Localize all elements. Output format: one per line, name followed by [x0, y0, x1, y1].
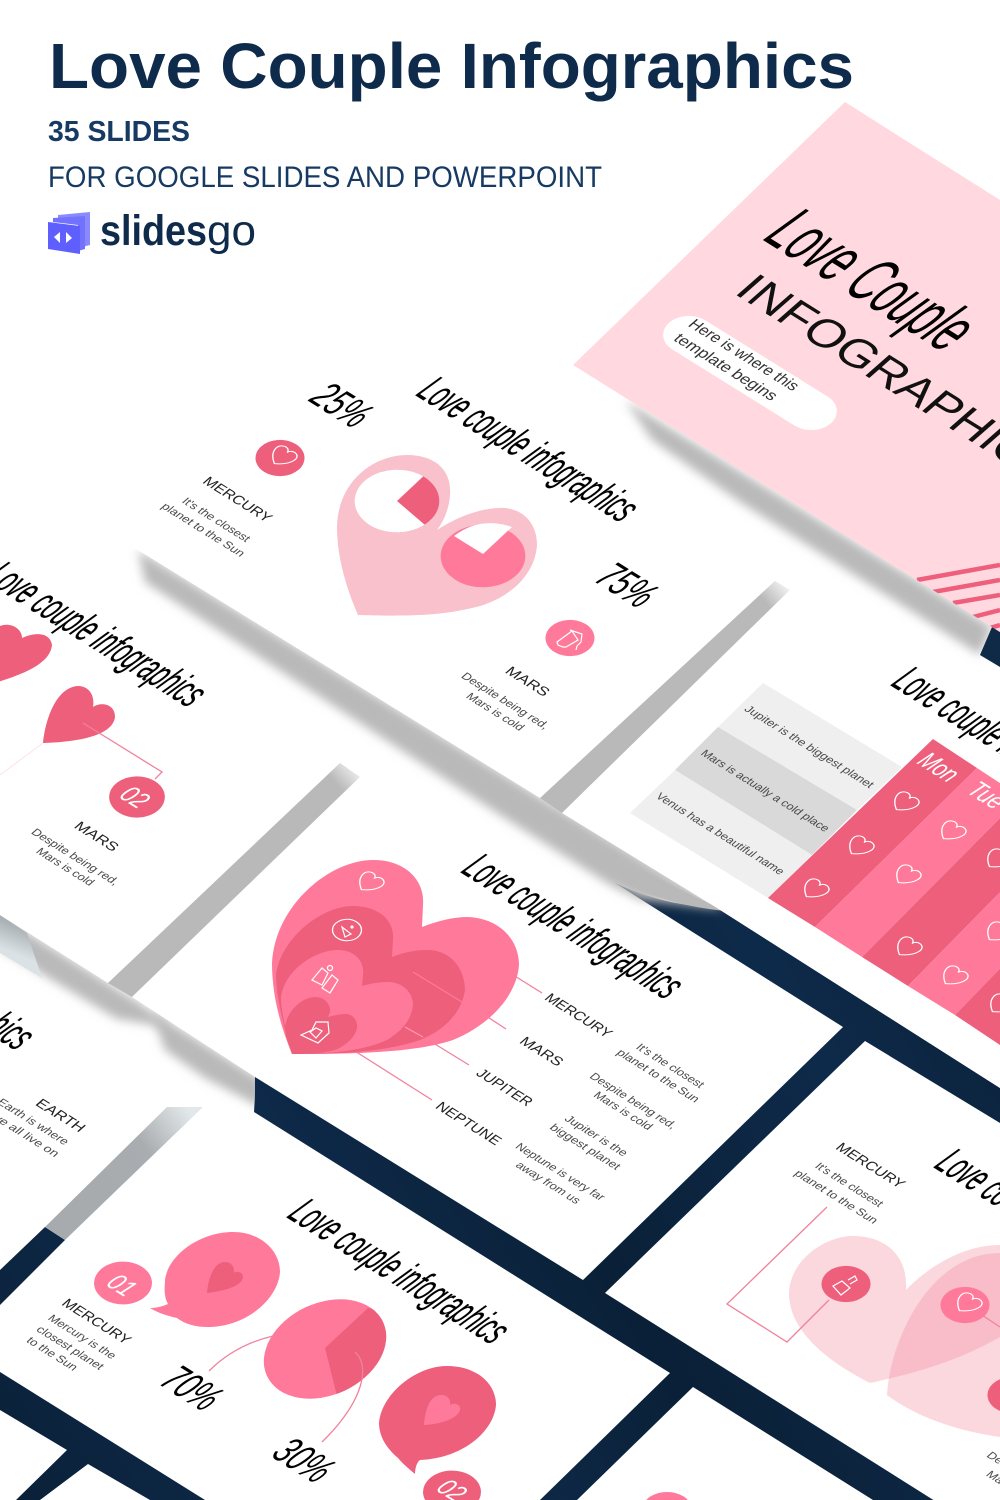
subtitle: FOR GOOGLE SLIDES AND POWERPOINT: [48, 161, 602, 194]
row text: Venus has a beautiful name: [653, 791, 788, 877]
navy corner wedge: [980, 627, 1000, 667]
text Mars: Despite being red,: [28, 827, 122, 887]
row 3: [630, 770, 812, 898]
bubble 1: [150, 1232, 280, 1327]
value 25%: 25%: [300, 374, 384, 436]
label Earth: EARTH: [32, 1097, 88, 1135]
column: Mon: [768, 739, 977, 927]
shadow: cover slide bottom edge: [625, 400, 992, 655]
icon: smile: [327, 915, 367, 945]
icon: chat badge: [535, 612, 605, 664]
column: third: [862, 797, 1000, 986]
text Mars: Mars is cold: [463, 691, 527, 733]
connector box: [727, 1207, 829, 1342]
descriptions: Mars is cold: [591, 1090, 655, 1132]
text Mercury: planet to the Sun: [158, 501, 248, 559]
chart: pie: [264, 1299, 386, 1399]
slide background: heart slide: [133, 290, 790, 798]
cover background: [573, 102, 1000, 632]
panel: overlapping hearts slide: [727, 1140, 1000, 1500]
value 70%: 70%: [150, 1357, 234, 1419]
labels: [432, 991, 615, 1148]
text Mars: Despite being red,: [458, 671, 552, 731]
shadow: lower left slide edge: [45, 1107, 203, 1240]
slide background: schedule slide: [562, 590, 1000, 1088]
header: [48, 30, 854, 255]
label Mercury: MERCURY: [58, 1297, 134, 1347]
chart: nested hearts: [272, 860, 519, 1054]
row text: Mars is actually a cold place: [698, 748, 833, 834]
logo wordmark: slidesgo: [100, 207, 256, 255]
slide background: lower left: [0, 1107, 670, 1500]
shadow: left slide bottom edge: [0, 915, 172, 1028]
descriptions: biggest planet: [547, 1122, 624, 1173]
column: fifth: [955, 855, 1000, 1045]
bottom slide fragment: [643, 1492, 691, 1500]
icon: hands holding heart: [301, 1022, 329, 1043]
row 2: [675, 727, 857, 855]
badge 02: 02: [113, 781, 157, 813]
connector line: [83, 723, 162, 779]
labels: NEPTUNE: [432, 1100, 505, 1148]
text Mercury: closest planet: [33, 1324, 107, 1372]
heading: Love couple infographics: [452, 845, 696, 1007]
badge fragment: [977, 1369, 1000, 1421]
badge 02: [411, 1462, 493, 1500]
bubble 2 heart: [424, 1395, 460, 1425]
column: Tue: [815, 768, 1000, 957]
panel: cover slide: [573, 102, 1000, 632]
bubble 1 heart: [207, 1262, 243, 1293]
bubble 2: [379, 1366, 496, 1474]
navy backdrop behind slides: [0, 882, 1000, 1500]
panel: balloon hearts slide: [0, 553, 219, 888]
heart markers: [797, 790, 1000, 1017]
icon badge: light: [930, 1279, 1000, 1331]
slide background: center slide: [132, 744, 843, 1280]
descriptions: Jupiter is the: [561, 1113, 631, 1159]
text Mercury: to the Sun: [23, 1335, 81, 1373]
row 1: [718, 683, 902, 810]
icon: heart: [352, 870, 387, 895]
heading: Love couple infographics: [278, 1190, 522, 1352]
cover pill text: Here is where this: [684, 316, 804, 394]
column labels: [911, 747, 1000, 814]
descriptions: Neptune is very far: [512, 1141, 608, 1203]
text Mercury: [23, 1313, 119, 1373]
shadow: center slide bottom edge: [150, 1010, 262, 1108]
shadow: left slide right edge: [108, 763, 360, 997]
badge 01: 01: [100, 1269, 144, 1301]
connector line: [982, 1315, 1000, 1327]
icon badge: dark: [811, 1258, 881, 1310]
logo icon: [48, 212, 90, 254]
descriptions: It's the closest: [633, 1042, 708, 1091]
text Mercury: Mercury is the: [45, 1313, 119, 1362]
descriptions: away from us: [513, 1160, 583, 1206]
icon: couple: [312, 966, 338, 993]
panel: far left slide fragment: [0, 896, 88, 1159]
pale connector: [0, 743, 43, 775]
label Mercury: MERCURY: [832, 1141, 908, 1191]
label Mars: MARS: [70, 819, 122, 855]
value 75%: 75%: [585, 554, 669, 616]
chart: double heart: [337, 455, 543, 616]
column: fourth: [908, 826, 1000, 1015]
slide background: lower right: [605, 1041, 1000, 1500]
panel: speech bubble slide: [23, 1190, 522, 1500]
labels: MERCURY: [541, 991, 615, 1041]
badge 02: [98, 768, 176, 826]
text Mercury: It's the closest: [812, 1161, 887, 1210]
labels: JUPITER: [472, 1067, 536, 1109]
slide background: bottom corners: [0, 1387, 873, 1500]
icon: heart badge: [245, 432, 315, 484]
shadow: heart slide right edge: [540, 578, 790, 813]
panel: nested heart slide: [272, 845, 708, 1206]
title: Love Couple Infographics: [49, 30, 854, 102]
labels: MARS: [516, 1035, 567, 1069]
label Mercury: MERCURY: [199, 475, 275, 525]
shadow: heart slide bottom edge: [138, 550, 725, 910]
text Mars: Mars is cold: [33, 846, 97, 888]
descriptions: planet to the Sun: [614, 1047, 702, 1105]
row text: [653, 704, 877, 877]
descriptions: Despite being red,: [587, 1071, 679, 1131]
row text: Jupiter is the biggest planet: [741, 704, 877, 791]
descriptions: [512, 1042, 708, 1206]
heart: lower: [43, 686, 115, 743]
cover stripes: [917, 565, 1000, 628]
text Mercury: It's the closest: [179, 496, 254, 545]
shadow tint: left slide bottom edge: [0, 915, 42, 978]
text Mercury: planet to the Sun: [791, 1168, 881, 1226]
heart B: [887, 1253, 1000, 1437]
heart A: [789, 1236, 1000, 1383]
heading: Love couple infographics: [407, 368, 651, 530]
cover pill: [653, 308, 847, 438]
badge 01: [82, 1253, 164, 1313]
leader lines: [209, 1336, 363, 1442]
panel: schedule slide: [630, 658, 1000, 1045]
label Mars: MARS: [501, 664, 553, 700]
leader lines: [350, 973, 542, 1100]
slide count: 35 SLIDES: [48, 116, 190, 148]
shadow wedge above navy: [625, 870, 725, 911]
panel: heart percentage slide: [158, 368, 669, 733]
cover pill text: template begins: [670, 330, 782, 404]
column labels: Mon: [911, 747, 967, 787]
slide background: left slide: [0, 540, 355, 983]
heart: upper: [0, 625, 52, 683]
